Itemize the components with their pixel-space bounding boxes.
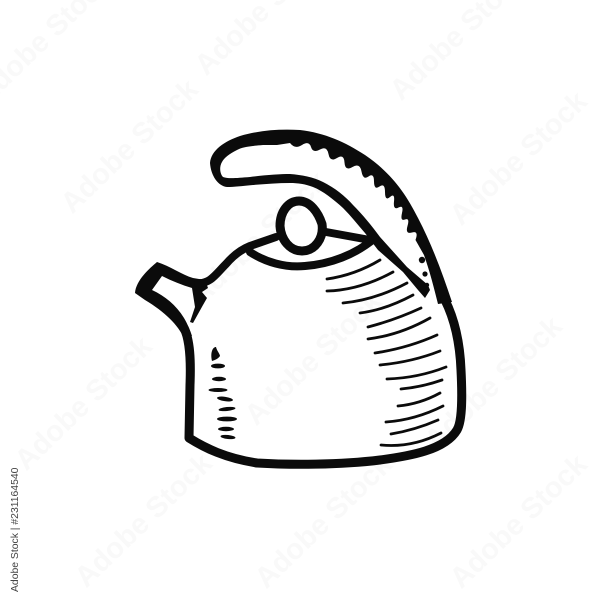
watermark pattern: Adobe Stock	[239, 285, 389, 432]
kettle	[135, 130, 462, 464]
shoulder curve	[198, 237, 276, 283]
left side hatching	[208, 347, 237, 440]
watermark pattern: Adobe Stock	[69, 447, 219, 594]
lid knob	[280, 201, 322, 251]
stock id caption: Adobe Stock | #231164540	[10, 467, 21, 592]
icon: spout scratch marks	[190, 288, 208, 323]
icon: handle with serrated edge	[210, 130, 452, 304]
icon: spout	[135, 262, 208, 338]
watermark pattern: Adobe Stock	[444, 85, 594, 232]
watermark pattern: Adobe Stock	[419, 310, 569, 457]
right side hatching	[327, 260, 446, 446]
watermark pattern: Adobe Stock	[55, 73, 205, 220]
watermark pattern: Adobe Stock	[444, 448, 594, 595]
lid and shoulder	[184, 201, 462, 464]
lid right band	[326, 232, 370, 240]
watermark pattern: Adobe Stock	[249, 448, 399, 595]
kettle body outline	[184, 300, 462, 464]
icon: handle rivets	[419, 257, 429, 287]
watermark pattern: Adobe Stock	[184, 165, 334, 312]
watermark pattern: Adobe Stock	[9, 330, 159, 477]
lid lower rim	[250, 238, 375, 266]
